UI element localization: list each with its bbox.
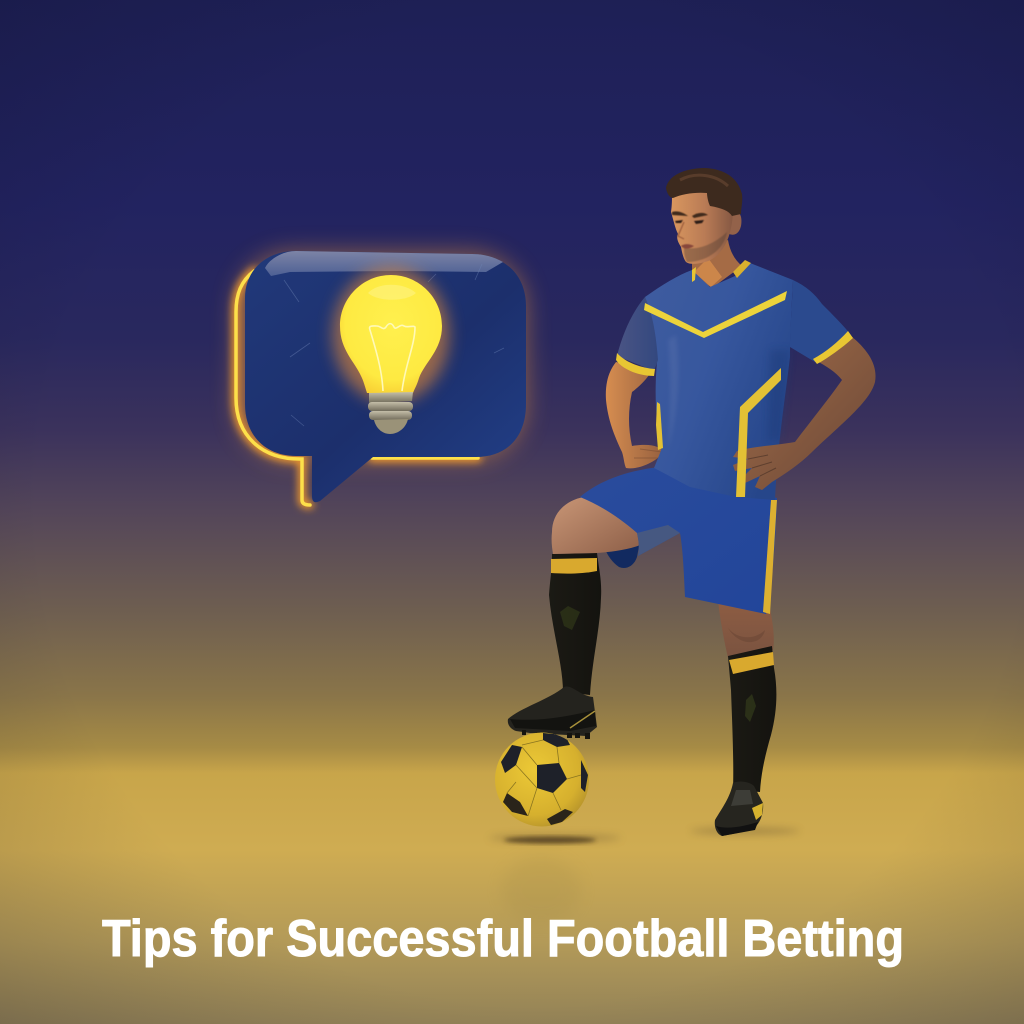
bulb screw base [368,392,413,434]
side stripes [656,368,781,497]
bulb halo [333,267,449,403]
chest chevron [644,291,787,338]
inner shorts lining [605,541,640,568]
right thigh and knee [718,600,774,658]
raised leg [508,497,640,739]
left sleeve [616,297,658,376]
right arm [733,336,876,490]
ball and boot shadows [489,828,800,844]
head [666,168,742,264]
glowing yellow outline [236,271,478,505]
jersey torso [645,263,793,500]
face [671,190,733,264]
title: Tips for Successful Football Betting [102,910,904,968]
facial features [672,211,708,249]
floor reflection of ball [501,856,581,924]
football player [508,168,876,836]
ear [729,212,741,235]
bubble body [245,251,526,502]
bulb filament [370,324,415,391]
right sock [728,646,776,792]
jersey [616,240,876,500]
left boot [508,687,597,739]
bubble outer glow [236,252,526,460]
neck [692,240,742,288]
speech bubble with light bulb [236,251,526,505]
left arm [606,362,664,468]
right sleeve [790,280,853,364]
shorts [580,467,777,614]
hair [666,168,742,216]
football [495,732,589,826]
standing leg [715,600,776,836]
left sock [549,553,601,695]
light bulb glass [340,275,442,393]
right boot [715,782,763,836]
collar [692,260,751,282]
left thigh and knee [552,497,640,554]
